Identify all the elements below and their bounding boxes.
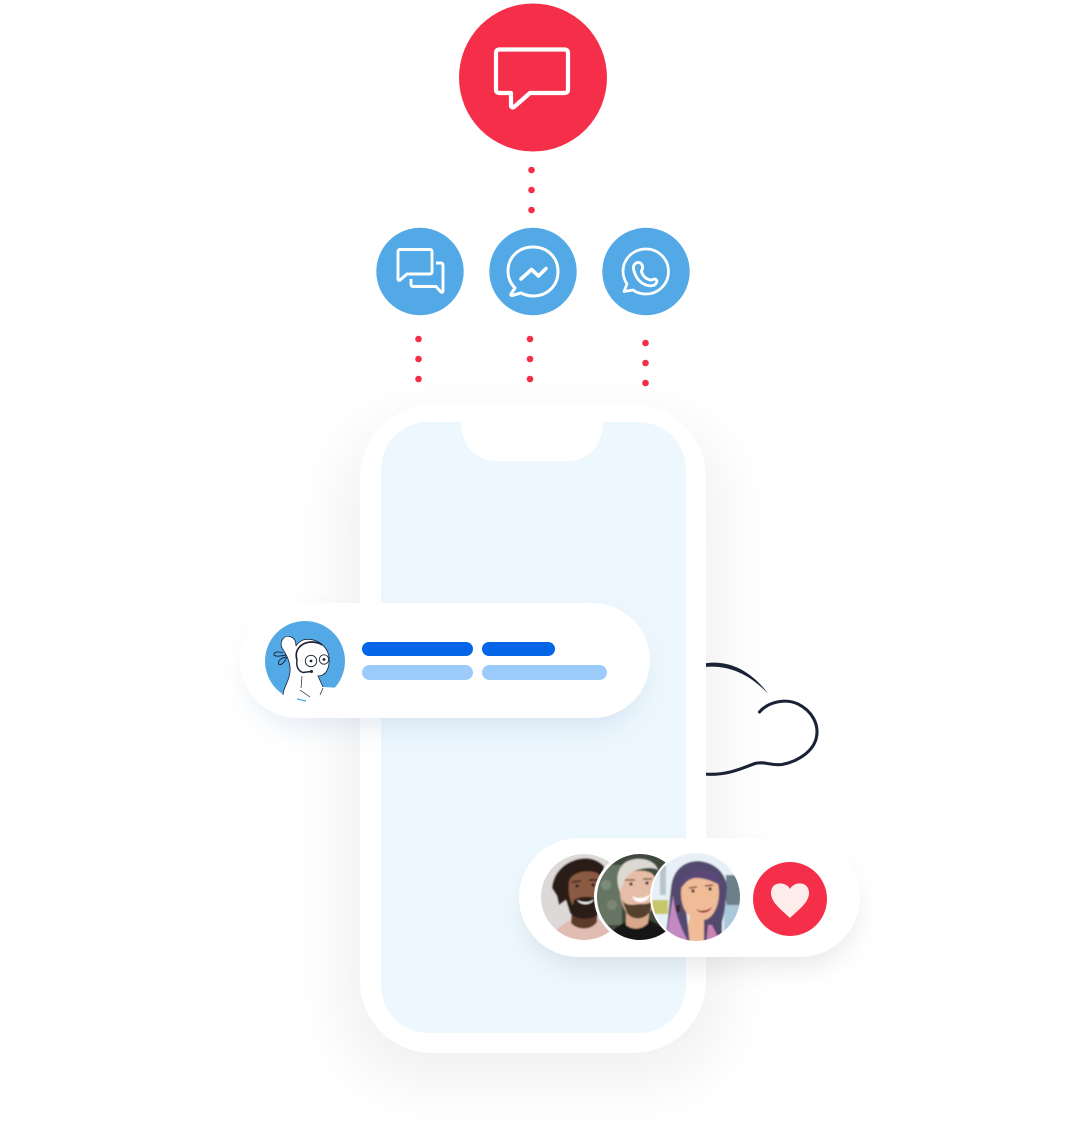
icon: messenger channel xyxy=(489,228,577,315)
card: people reactions xyxy=(519,838,860,957)
photo: woman with purple hair xyxy=(650,851,742,943)
dotted connector: red circle to channels xyxy=(528,167,535,213)
phone xyxy=(360,405,706,1053)
avatar: support agent with headset xyxy=(265,621,345,703)
dotted connectors: channels to phone xyxy=(415,336,649,386)
card: agent message xyxy=(240,603,650,718)
card shadow: agent xyxy=(250,622,642,726)
message lines xyxy=(362,642,607,680)
card shadow: people xyxy=(528,860,854,964)
phone shadow xyxy=(345,425,721,1080)
icon: whatsapp channel xyxy=(602,228,690,315)
icon: speech cloud outline behind phone xyxy=(704,663,817,774)
phone screen xyxy=(381,422,686,1033)
photo: blond man with beard xyxy=(594,851,686,943)
photo: man with dreadlocks xyxy=(541,854,610,940)
icon: heart button xyxy=(753,862,827,936)
icon: red speech bubble circle xyxy=(459,4,607,152)
icon: chat bubbles channel xyxy=(376,228,464,315)
